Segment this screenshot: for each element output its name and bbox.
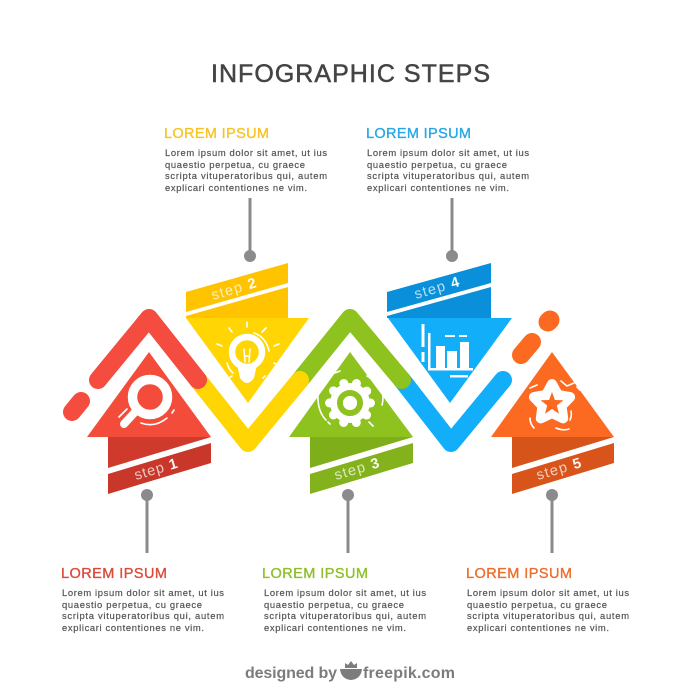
text block: step 1 xyxy=(61,566,224,633)
text block: step 4 xyxy=(366,126,529,193)
text block: step 5: explicari contentiones ne vim. xyxy=(467,622,609,633)
text block: step 4: LOREM IPSUM xyxy=(366,126,471,142)
text block: step 1: Lorem ipsum dolor sit amet, ut ius xyxy=(62,587,224,598)
text block: step 5 xyxy=(466,566,629,633)
chevron: green xyxy=(300,318,402,380)
text block: step 3: explicari contentiones ne vim. xyxy=(264,622,406,633)
label: step 2: step 2 xyxy=(210,275,258,304)
icon: bar chart xyxy=(422,324,473,378)
chevron: yellow xyxy=(198,380,300,443)
text block: step 5: quaestio perpetua, cu graece xyxy=(467,599,607,610)
text block: step 3: scripta vituperatoribus qui, autem xyxy=(264,610,426,621)
arrow: step 3 xyxy=(289,352,413,494)
footer credit xyxy=(245,661,455,682)
text block: step 1: LOREM IPSUM xyxy=(61,566,167,582)
text block: step 3: Lorem ipsum dolor sit amet, ut ius xyxy=(264,587,426,598)
arrow: step 1 xyxy=(87,352,211,494)
text block: step 2 xyxy=(164,126,327,193)
text block: step 3: quaestio perpetua, cu graece xyxy=(264,599,404,610)
chevron: red xyxy=(98,318,198,380)
connector pin: step 3 xyxy=(342,489,354,553)
footer credit: freepik.com xyxy=(363,665,455,682)
icon: freepik logo xyxy=(340,661,362,680)
text block: step 3 xyxy=(262,566,426,633)
text block: step 1: explicari contentiones ne vim. xyxy=(62,622,204,633)
icon: magnifier xyxy=(119,380,174,425)
text block: step 2: explicari contentiones ne vim. xyxy=(165,182,307,193)
text block: step 4: quaestio perpetua, cu graece xyxy=(367,159,507,170)
footer credit: designed by xyxy=(245,665,337,682)
text block: step 4: explicari contentiones ne vim. xyxy=(367,182,509,193)
arrow: step 4 xyxy=(387,263,512,403)
label: step 4: step 4 xyxy=(413,274,461,303)
text block: step 1: scripta vituperatoribus qui, autem xyxy=(62,610,224,621)
connector pin: step 5 xyxy=(546,489,558,553)
text block: step 2: Lorem ipsum dolor sit amet, ut ius xyxy=(165,147,327,158)
icon: star xyxy=(530,381,580,430)
label: step 1: step 1 xyxy=(133,456,179,484)
text block: step 5: scripta vituperatoribus qui, autem xyxy=(467,610,629,621)
text block: step 4: scripta vituperatoribus qui, autem xyxy=(367,170,529,181)
arrow: step 2 xyxy=(186,263,309,403)
connector pin: step 4 xyxy=(446,198,458,262)
text block: step 5: Lorem ipsum dolor sit amet, ut ius xyxy=(467,587,629,598)
dash: orange long xyxy=(521,342,532,355)
icon: gear xyxy=(318,371,383,426)
text block: step 4: Lorem ipsum dolor sit amet, ut ius xyxy=(367,147,529,158)
text block: step 2: quaestio perpetua, cu graece xyxy=(165,159,305,170)
text block: step 3: LOREM IPSUM xyxy=(262,566,368,582)
dash: orange short xyxy=(548,320,550,322)
dash: red xyxy=(72,401,81,412)
text block: step 1: quaestio perpetua, cu graece xyxy=(62,599,202,610)
label: step 5: step 5 xyxy=(535,455,583,484)
text block: step 2: scripta vituperatoribus qui, autem xyxy=(165,170,327,181)
arrow: step 5 xyxy=(491,352,614,494)
text block: step 5: LOREM IPSUM xyxy=(466,566,572,582)
title: INFOGRAPHIC STEPS xyxy=(211,60,490,88)
connector pin: step 2 xyxy=(244,198,256,262)
label: step 3: step 3 xyxy=(333,455,381,484)
chevron: blue xyxy=(402,380,503,443)
connector pin: step 1 xyxy=(141,489,153,553)
text block: step 2: LOREM IPSUM xyxy=(164,126,269,142)
icon: light bulb xyxy=(217,322,279,383)
